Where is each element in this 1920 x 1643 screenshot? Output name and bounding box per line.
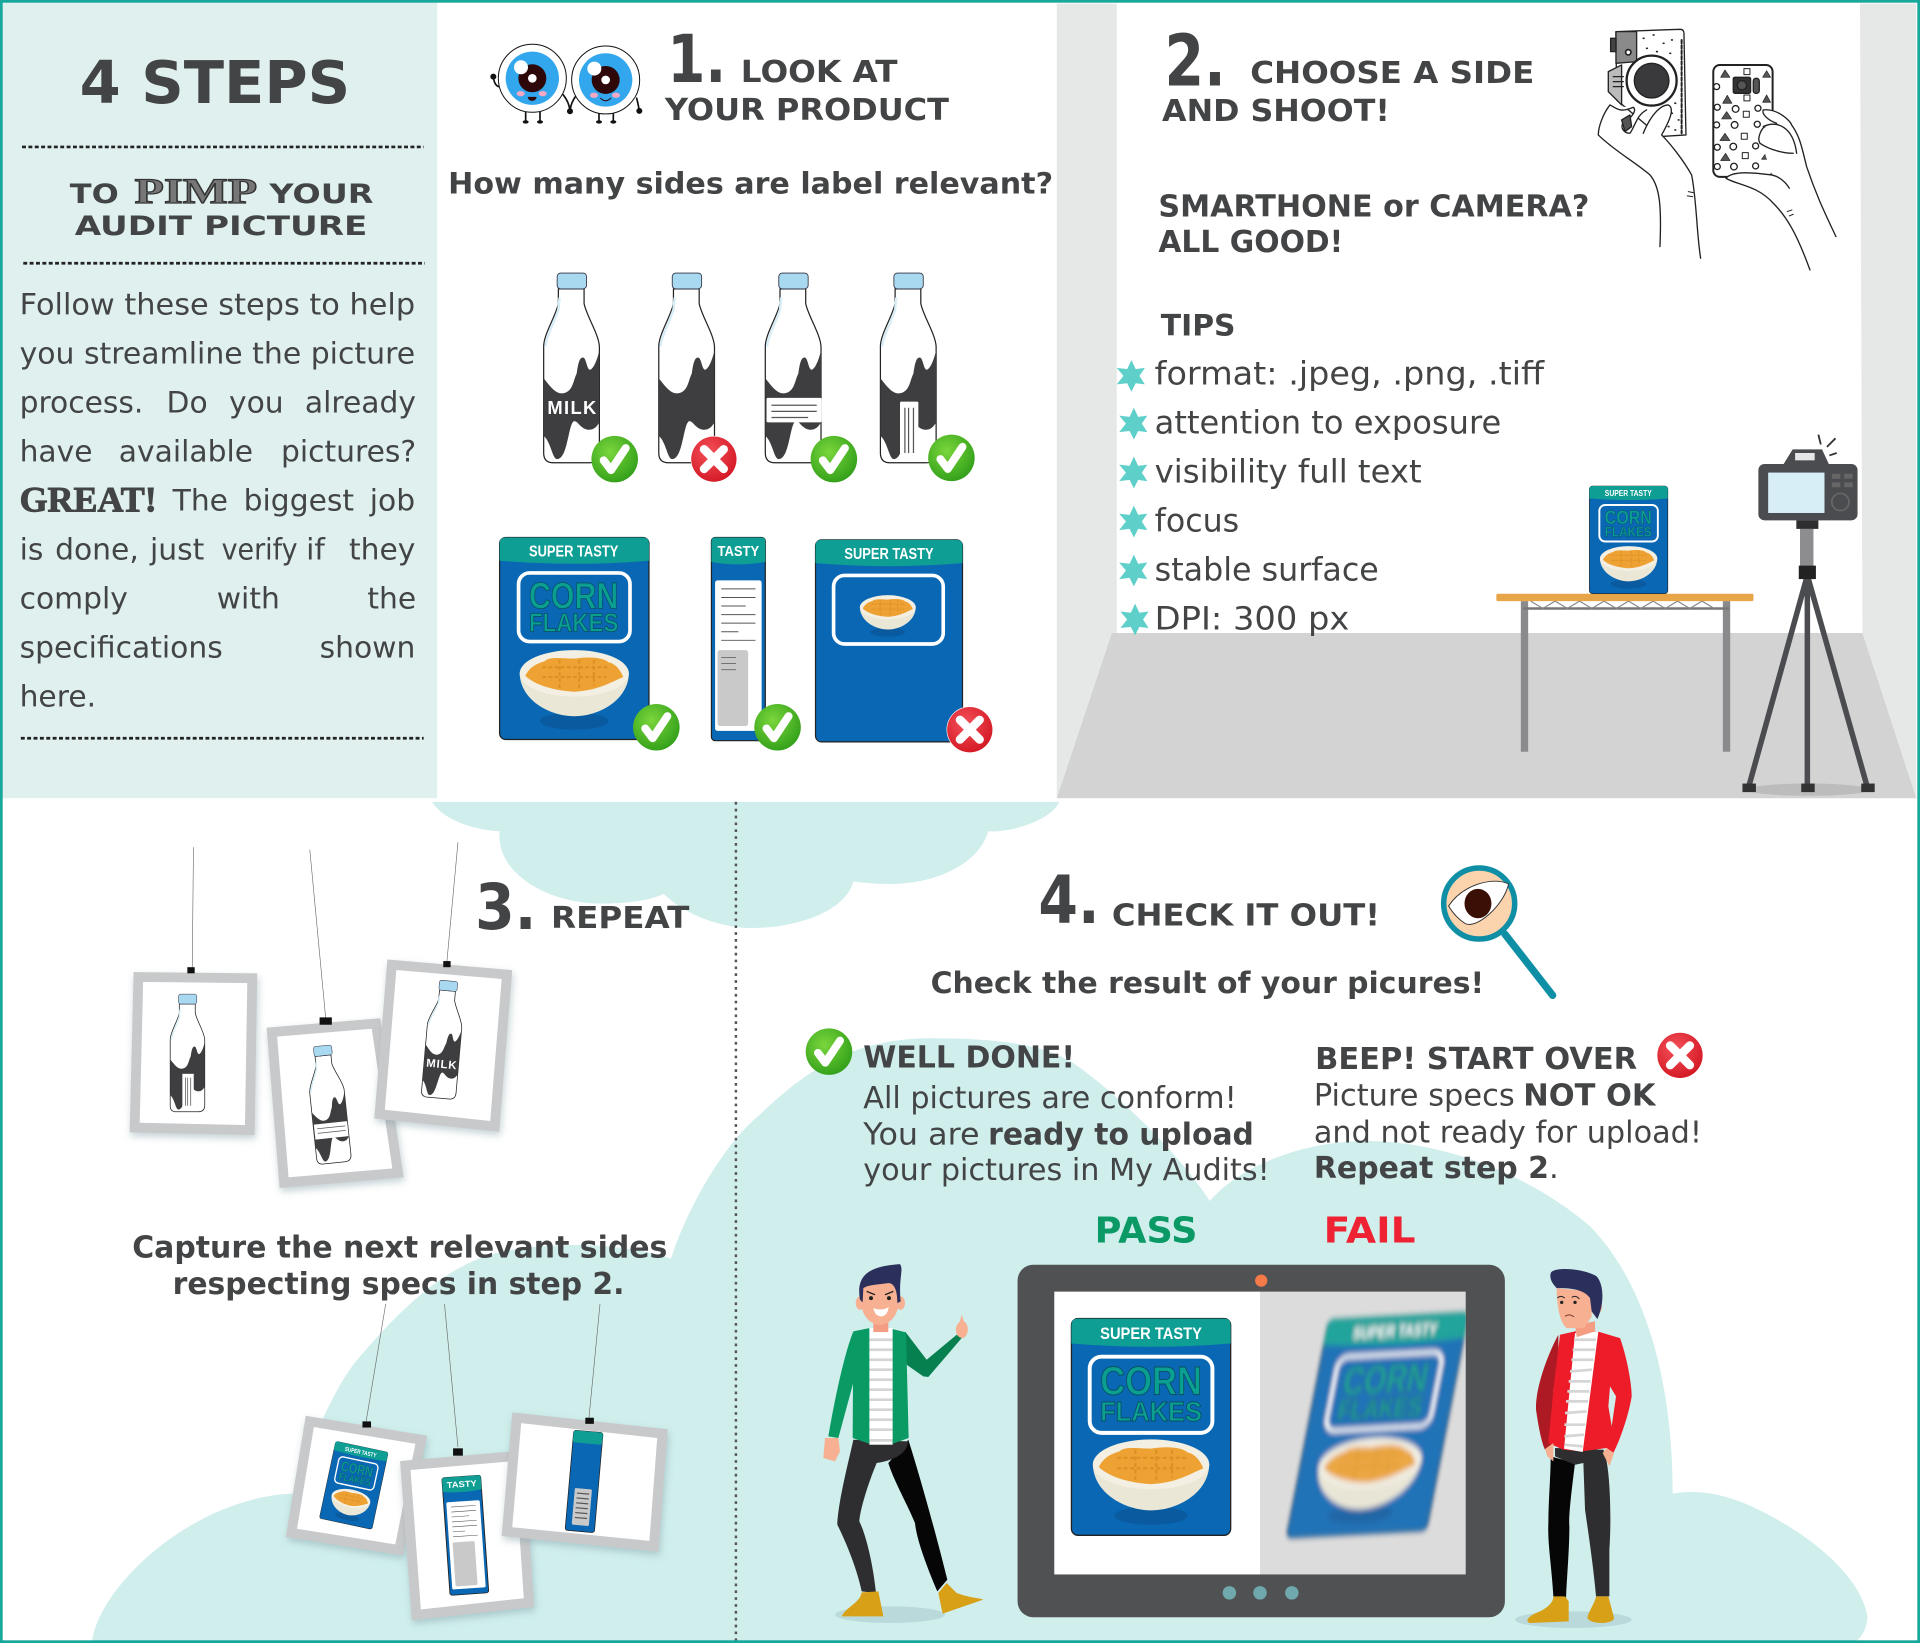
icon: hands with camera and smartphone [1598, 29, 1836, 270]
character: happy man [823, 1264, 983, 1623]
intro text: they [349, 533, 415, 568]
pass photo: FLAKES [1100, 1396, 1202, 1427]
heading: step 3: REPEAT [551, 901, 690, 936]
fail photo: CORN [1340, 1355, 1432, 1403]
intro text: job [369, 484, 415, 519]
panel: step 4 [806, 862, 1703, 1628]
box on table: SUPER TASTY [1605, 489, 1652, 498]
intro text: the [367, 581, 416, 616]
block: pass message: All pictures are conform! [863, 1081, 1237, 1116]
panel: step 2 [1057, 4, 1916, 798]
hanging photo: cereal box side: TASTY [446, 1479, 478, 1491]
block: pass message: You are [862, 1118, 980, 1153]
intro text: already [305, 386, 416, 421]
intro text: shown [320, 630, 415, 665]
intro text: Do [167, 386, 208, 421]
box: side: TASTY [718, 544, 759, 560]
hanging photo: milk bottle: MILK [426, 1058, 458, 1072]
tips list: stable surface [1155, 550, 1379, 588]
intro text: specifications [20, 630, 223, 665]
intro text: pictures? [281, 435, 416, 470]
studio room [1057, 4, 1916, 798]
intro text: done, [55, 533, 139, 568]
intro text: available [119, 435, 253, 470]
intro text: process. [20, 386, 143, 421]
box: front: CORN [529, 575, 618, 616]
block: fail message: NOT OK [1523, 1079, 1657, 1114]
block: fail message: BEEP! START OVER [1315, 1042, 1637, 1077]
intro text: verify [222, 533, 298, 568]
title: 4 STEPS: 4 STEPS [80, 48, 350, 117]
tips list: attention to exposure [1155, 403, 1501, 441]
box on table: CORN [1605, 507, 1652, 529]
hanging photo: cereal box front [291, 1304, 421, 1550]
hanging photo: milk bottle [380, 842, 507, 1126]
icon: magnifier with eye [1444, 868, 1553, 995]
subtitle: YOUR [268, 179, 374, 210]
heading: step 1: YOUR PRODUCT [664, 93, 949, 128]
box: front: FLAKES [529, 610, 618, 638]
intro text: is [20, 533, 43, 568]
bottle: front: MILK [547, 397, 597, 418]
intro text: you streamline the picture [20, 337, 415, 372]
heading: step 3 [475, 871, 690, 945]
panel: intro [0, 0, 437, 798]
cloud: bottom [92, 1038, 1867, 1643]
fail photo: SUPER TASTY [1351, 1321, 1439, 1343]
pass photo [1071, 1319, 1231, 1535]
label: FAIL: FAIL [1324, 1211, 1416, 1252]
pass photo: SUPER TASTY [1100, 1325, 1202, 1343]
tablet [1018, 1265, 1505, 1617]
cloud: top [432, 802, 1059, 928]
tripod camera [1742, 435, 1875, 796]
intro text: here. [20, 679, 96, 714]
hanging photo: cereal box front: FLAKES [338, 1471, 372, 1489]
check: side box [754, 704, 801, 750]
hanging photo: cereal box front: CORN [340, 1458, 374, 1480]
intro text: biggest [244, 484, 354, 519]
intro text: with [217, 581, 280, 616]
heading: step 3: 3. [475, 871, 536, 945]
intro text [20, 288, 416, 714]
box: back [816, 540, 963, 742]
intro text: just [149, 533, 204, 568]
subheading: ALL GOOD! [1158, 225, 1343, 260]
hanging photo: barcode bottle [135, 847, 252, 1130]
box: side [711, 537, 765, 741]
heading: step 1: 1. [667, 21, 726, 98]
tips heading: TIPS [1161, 308, 1236, 342]
heading: step 4 [1038, 862, 1380, 939]
panel: step 1 [448, 21, 1053, 753]
heading: step 1 [664, 21, 949, 128]
heading: step 1: LOOK AT [741, 55, 898, 90]
tips list: visibility full text [1155, 452, 1422, 490]
block: fail message: Picture specs [1314, 1079, 1515, 1114]
fail photo: FLAKES [1335, 1390, 1425, 1426]
bottle: blank side [659, 273, 737, 482]
icon: eye characters [490, 44, 642, 124]
block: pass message [806, 1028, 1270, 1188]
intro text: if [306, 533, 326, 568]
block: fail message: . [1549, 1151, 1559, 1186]
heading: step 4: CHECK IT OUT! [1112, 899, 1380, 934]
intro text: The [172, 484, 228, 519]
subheading [1158, 190, 1589, 260]
bottle: front [544, 273, 638, 482]
instruction text: Capture the next relevant sides [132, 1230, 667, 1265]
check: front box [633, 704, 680, 750]
intro text: you [229, 386, 284, 421]
panel: step 3 [132, 842, 690, 1615]
hanging photo: ingredients bottle [272, 850, 398, 1183]
hanging photo: cereal box back [507, 1304, 662, 1546]
tips list: DPI: 300 px [1155, 599, 1349, 637]
tips list: focus [1155, 501, 1239, 539]
subtitle [70, 171, 374, 242]
block: pass message: ready to upload [988, 1118, 1254, 1153]
block: fail message [1314, 1032, 1703, 1186]
cross: back box [947, 706, 993, 753]
intro text: have [20, 435, 93, 470]
label: PASS: PASS [1095, 1211, 1198, 1252]
subtitle: AUDIT PICTURE [75, 211, 367, 242]
tips list: format: .jpeg, .png, .tiff [1155, 354, 1545, 392]
box: back: SUPER TASTY [844, 546, 934, 563]
bottle: ingredients [765, 273, 857, 482]
box: front [500, 537, 649, 739]
fail photo [1286, 1312, 1469, 1538]
bottle: barcode [880, 273, 975, 481]
subtitle: PIMP [135, 171, 257, 211]
intro text: GREAT! [20, 480, 157, 520]
divider [735, 802, 737, 1643]
character: sad man [1515, 1269, 1632, 1628]
subheading: Check the result of your picures! [931, 966, 1484, 1000]
subtitle: TO [70, 179, 119, 210]
block: fail message: and not ready for upload! [1314, 1115, 1702, 1150]
block: pass message: WELL DONE! [863, 1041, 1075, 1076]
intro text: comply [20, 581, 128, 616]
box: front: SUPER TASTY [529, 544, 618, 561]
heading: step 2: AND SHOOT! [1162, 94, 1390, 129]
block: fail message: Repeat step 2 [1314, 1151, 1549, 1186]
table [1496, 594, 1753, 752]
subheading: SMARTHONE or CAMERA? [1158, 190, 1589, 225]
heading: step 2 [1162, 20, 1534, 129]
instruction text: respecting specs in step 2. [173, 1267, 624, 1302]
hanging photo: cereal box front: SUPER TASTY [344, 1447, 377, 1459]
heading: step 2: CHOOSE A SIDE [1250, 56, 1534, 91]
instruction text [132, 1230, 667, 1302]
box on table: FLAKES [1605, 524, 1652, 539]
heading: step 2: 2. [1164, 20, 1226, 103]
block: pass message: your pictures in My Audits! [863, 1153, 1270, 1188]
pass photo: CORN [1100, 1360, 1202, 1404]
heading: step 4: 4. [1038, 862, 1100, 939]
question: How many sides are label relevant? [448, 166, 1053, 200]
box on table [1589, 486, 1668, 594]
hanging photo: cereal box side [405, 1304, 529, 1615]
intro text: Follow these steps to help [20, 288, 415, 323]
tips list [1117, 354, 1545, 637]
